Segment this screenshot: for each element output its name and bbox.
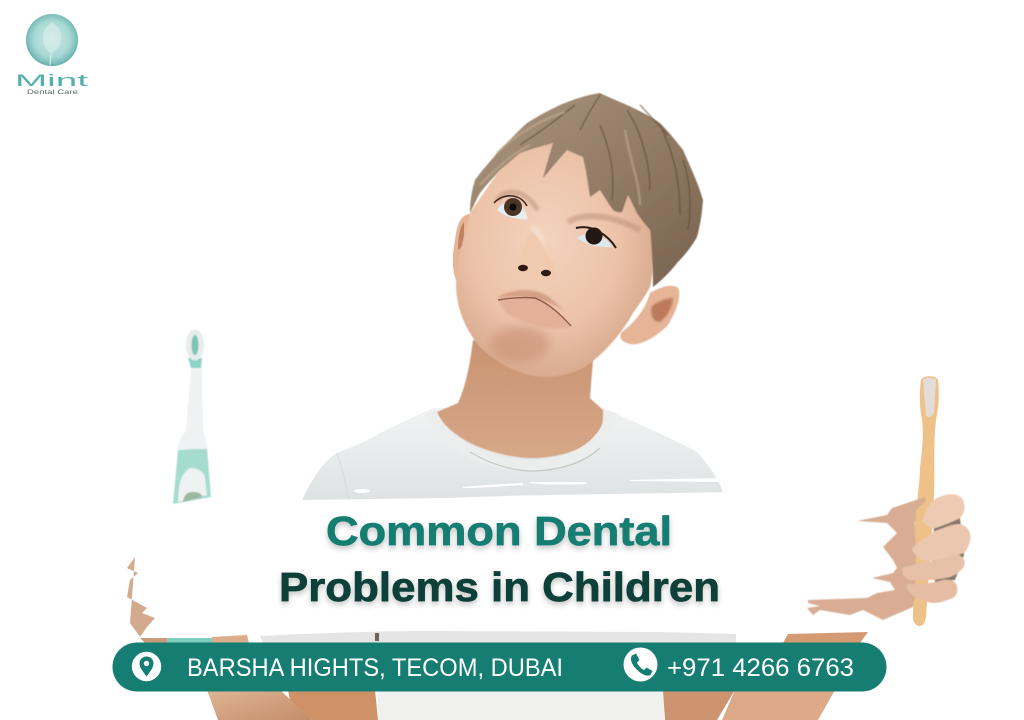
pill background: [112, 642, 886, 692]
brush stem over palm: [916, 495, 933, 558]
logo wordmark: Mint: [15, 71, 89, 90]
band above pill: [140, 631, 868, 643]
location icon: [132, 652, 161, 681]
logo tagline: Dental Care: [27, 89, 79, 96]
boy: hair: [470, 93, 703, 287]
nose: [513, 230, 556, 282]
wooden toothbrush handle: [913, 376, 939, 626]
title: [279, 508, 720, 610]
logo: Mint Dental Care: [15, 14, 89, 96]
phone icon: [624, 648, 658, 682]
torn hand fragment left: [127, 557, 155, 637]
palm and wrist: [807, 497, 927, 620]
finger 4: [907, 580, 957, 603]
finger 1: [923, 494, 964, 529]
title line 2: Problems in Children: [279, 564, 720, 610]
phone number: +971 4266 6763: [667, 654, 854, 682]
contact pill: [112, 642, 886, 692]
finger 2: [912, 524, 970, 561]
boy: neck: [431, 340, 612, 471]
finger gaps: [932, 518, 964, 582]
bristles: [923, 378, 936, 417]
right eye: [576, 227, 616, 248]
title line 1: Common Dental: [326, 508, 672, 554]
arms below pill: [207, 690, 835, 720]
shirt below pill: [378, 690, 664, 720]
torn hand: [807, 494, 970, 620]
mouth: [496, 290, 571, 329]
finger 3: [902, 555, 965, 580]
boy: right ear: [620, 286, 679, 344]
left eye: [494, 196, 528, 219]
brush tip below hand: [913, 600, 926, 626]
boy: face: [456, 140, 653, 377]
address: BARSHA HIGHTS, TECOM, DUBAI: [187, 654, 563, 682]
boy: left ear: [453, 214, 475, 280]
logo sphere with leaf: [26, 14, 78, 66]
electric toothbrush: [173, 330, 211, 504]
boy: shirt: [302, 408, 723, 500]
